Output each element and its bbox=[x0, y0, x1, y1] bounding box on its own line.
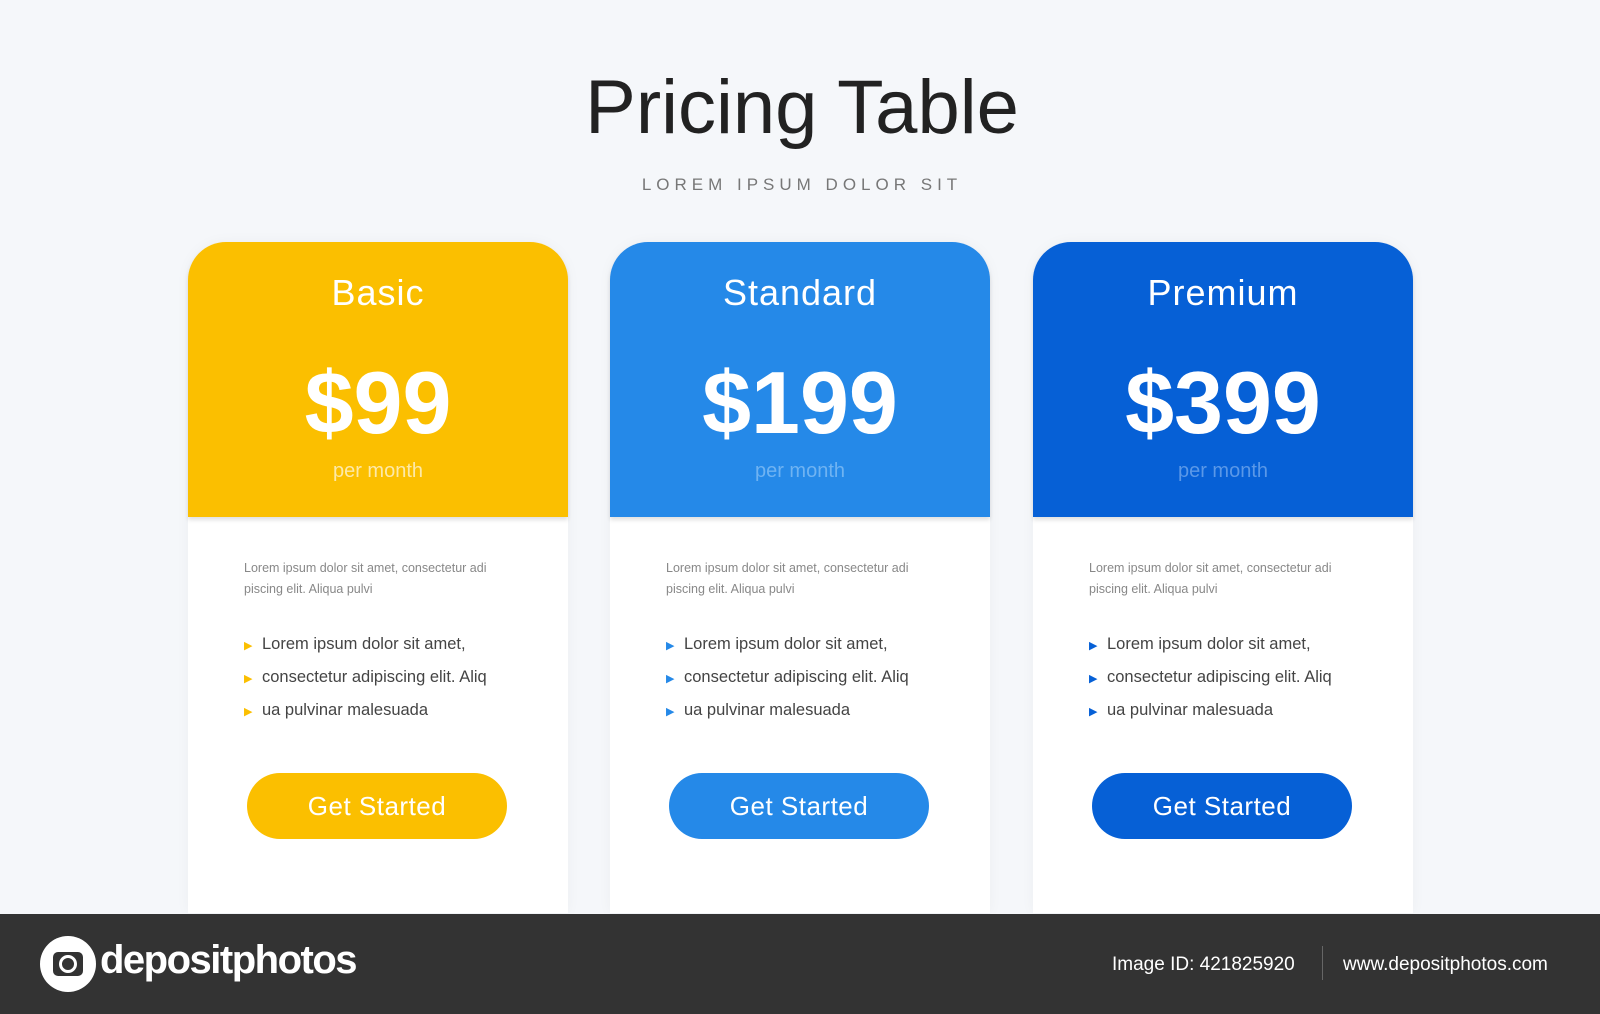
logo text: depositphotos bbox=[100, 938, 356, 982]
feature list: ▶ bbox=[244, 640, 252, 652]
feature list: ▶ bbox=[244, 673, 252, 685]
button bbox=[1092, 773, 1352, 839]
title: Pricing Table bbox=[585, 65, 1019, 150]
header: basic: per month bbox=[333, 460, 423, 482]
feature list: ▶ bbox=[1089, 640, 1097, 652]
header: premium: per month bbox=[1178, 460, 1268, 482]
panel: premium bbox=[1033, 242, 1413, 913]
feature list: consectetur adipiscing elit. Aliq bbox=[684, 668, 909, 686]
button: Get Started bbox=[308, 791, 446, 821]
website: www.depositphotos.com bbox=[1343, 954, 1548, 975]
description: Lorem ipsum dolor sit amet, consectetur adi piscing elit. Aliqua pulvi bbox=[666, 561, 908, 596]
feature list: ▶ bbox=[666, 640, 674, 652]
feature list: ▶ bbox=[1089, 673, 1097, 685]
header: standard: $199 bbox=[702, 353, 898, 452]
feature list: Lorem ipsum dolor sit amet, bbox=[1107, 635, 1311, 653]
subtitle: LOREM IPSUM DOLOR SIT bbox=[642, 175, 962, 194]
panel: basic bbox=[188, 242, 568, 913]
feature list: ▶ bbox=[244, 706, 252, 718]
header: basic bbox=[188, 242, 568, 517]
icon: camera logo bbox=[40, 936, 96, 992]
header: premium bbox=[1033, 242, 1413, 517]
image id: Image ID: 421825920 bbox=[1112, 954, 1295, 975]
feature list: ua pulvinar malesuada bbox=[262, 701, 428, 719]
header: basic: $99 bbox=[305, 353, 451, 452]
header: basic: Basic bbox=[331, 272, 425, 313]
description: Lorem ipsum dolor sit amet, consectetur adi piscing elit. Aliqua pulvi bbox=[244, 561, 486, 596]
feature list bbox=[1089, 635, 1332, 719]
feature list: consectetur adipiscing elit. Aliq bbox=[1107, 668, 1332, 686]
button: Get Started bbox=[730, 791, 868, 821]
feature list: ▶ bbox=[1089, 706, 1097, 718]
button bbox=[247, 773, 507, 839]
feature list: ▶ bbox=[666, 706, 674, 718]
description: Lorem ipsum dolor sit amet, consectetur adi piscing elit. Aliqua pulvi bbox=[1089, 561, 1331, 596]
footer bar bbox=[0, 914, 1600, 1014]
feature list: ▶ bbox=[666, 673, 674, 685]
header: standard: Standard bbox=[723, 272, 877, 313]
feature list bbox=[244, 635, 487, 719]
header: premium: Premium bbox=[1147, 272, 1299, 313]
feature list: ua pulvinar malesuada bbox=[684, 701, 850, 719]
panel: standard bbox=[610, 242, 990, 913]
feature list bbox=[666, 635, 909, 719]
feature list: ua pulvinar malesuada bbox=[1107, 701, 1273, 719]
feature list: Lorem ipsum dolor sit amet, bbox=[262, 635, 466, 653]
feature list: Lorem ipsum dolor sit amet, bbox=[684, 635, 888, 653]
button bbox=[669, 773, 929, 839]
header: standard bbox=[610, 242, 990, 517]
header: standard: per month bbox=[755, 460, 845, 482]
button: Get Started bbox=[1153, 791, 1291, 821]
header: premium: $399 bbox=[1125, 353, 1321, 452]
feature list: consectetur adipiscing elit. Aliq bbox=[262, 668, 487, 686]
